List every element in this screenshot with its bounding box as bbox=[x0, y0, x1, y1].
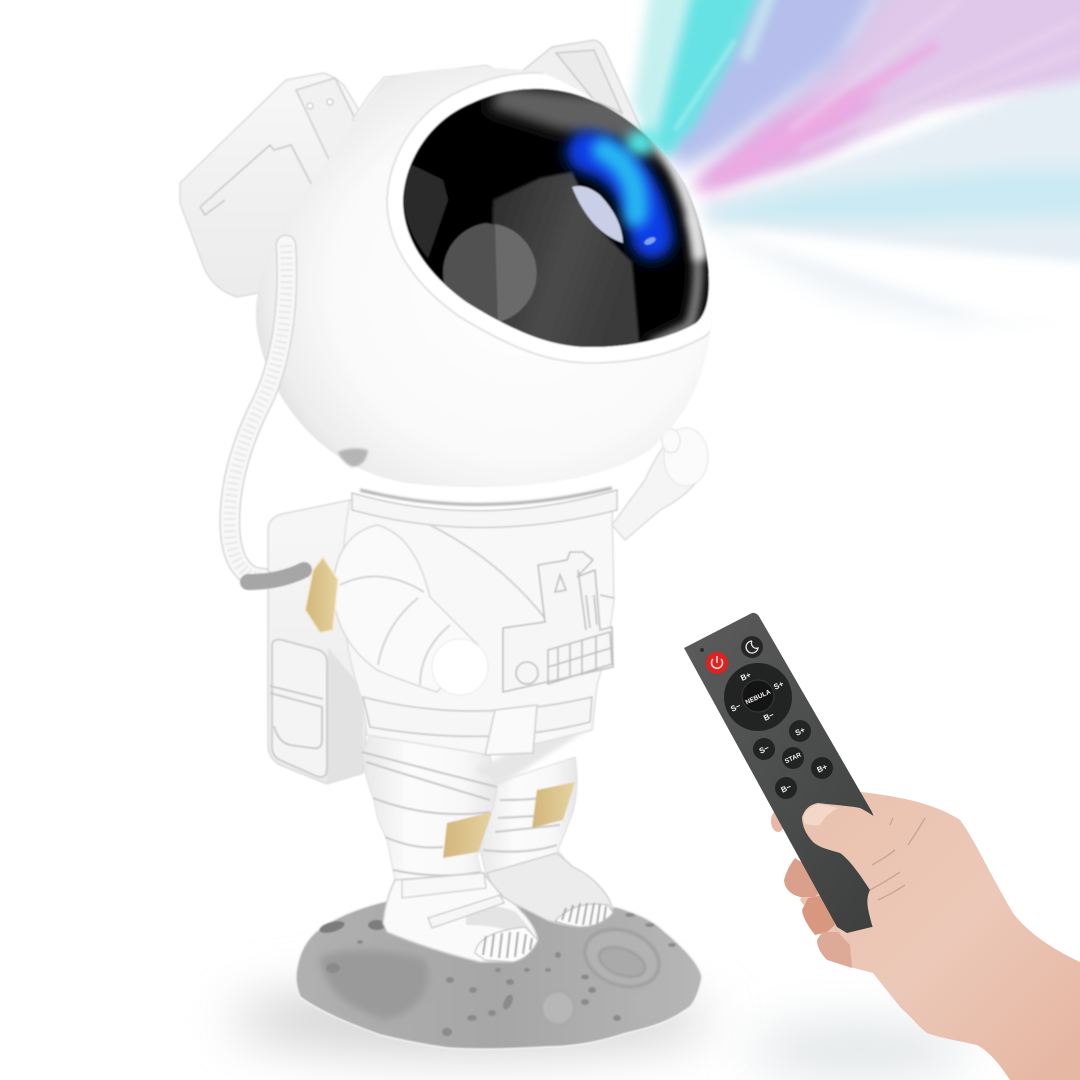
right shoe ribs bbox=[555, 904, 613, 927]
visor glass bbox=[395, 80, 715, 355]
knuckle creases bbox=[870, 818, 925, 900]
cable main bbox=[230, 245, 287, 578]
button: star: STAR bbox=[784, 752, 803, 765]
remote body bbox=[684, 613, 890, 933]
beam: pale grey-blue lower fan bbox=[700, 50, 1080, 270]
blue glow bbox=[588, 152, 652, 238]
gold shoulder patch bbox=[305, 557, 338, 633]
gold knee patch left bbox=[443, 812, 492, 858]
thumb and palm bbox=[802, 803, 1000, 1035]
cyan outlet bbox=[626, 131, 654, 155]
backpack bbox=[268, 498, 368, 784]
visor rim bbox=[403, 89, 709, 347]
button: B plus: B+ bbox=[816, 762, 829, 775]
side units bbox=[180, 40, 643, 297]
button: B plus bbox=[811, 757, 833, 779]
beam: cyan band bbox=[705, 170, 1080, 222]
left shoe bbox=[383, 873, 538, 962]
near arm bbox=[305, 525, 488, 695]
finger one bbox=[784, 858, 830, 897]
button: star bbox=[782, 747, 804, 769]
cable rope weave bbox=[230, 245, 287, 578]
lens spark bbox=[643, 236, 657, 246]
light beams bbox=[632, 0, 1080, 330]
visor left panel bbox=[404, 165, 448, 258]
visor top grey haze bbox=[490, 85, 680, 170]
visor reflection right half bbox=[495, 224, 537, 322]
nebula dial: S− bbox=[729, 701, 743, 714]
cable outline bbox=[230, 245, 287, 578]
top right unit bbox=[521, 40, 643, 133]
helmet shell bbox=[256, 68, 712, 487]
hand behind remote bbox=[771, 792, 1080, 1080]
small craters bbox=[318, 913, 676, 1036]
left shoe ribs bbox=[475, 927, 538, 962]
nebula dial: S+ bbox=[772, 679, 786, 692]
large left crater bbox=[320, 950, 428, 1020]
cyan glow bbox=[604, 150, 636, 215]
nebula dial: B+ bbox=[739, 670, 753, 683]
crotch shade bbox=[475, 730, 587, 785]
right shoe bbox=[487, 853, 613, 927]
cable bbox=[230, 245, 304, 582]
palm and thumb shape bbox=[802, 803, 1000, 1035]
ground shadows bbox=[230, 984, 970, 1076]
grey-white dome edge bbox=[655, 135, 700, 260]
helmet collar cap bbox=[352, 65, 520, 130]
remote control bbox=[684, 613, 890, 933]
finger three bbox=[817, 932, 852, 968]
large right crater bbox=[577, 920, 667, 996]
thumb nail bbox=[803, 804, 838, 825]
inner right crater bbox=[595, 942, 649, 982]
fist bbox=[432, 639, 488, 695]
nebula dial: NEBULA bbox=[744, 688, 772, 706]
button: B minus bbox=[775, 777, 797, 799]
base shadow bbox=[230, 984, 710, 1056]
dome crater small bbox=[635, 991, 659, 1019]
neck shadow bbox=[360, 488, 612, 505]
moon base bbox=[296, 900, 702, 1049]
torso body bbox=[342, 500, 614, 755]
button: S plus: S+ bbox=[794, 725, 807, 738]
lens bbox=[572, 186, 623, 243]
left leg bbox=[362, 735, 497, 880]
leg ridges bbox=[362, 752, 560, 876]
backpack side shade bbox=[327, 647, 363, 784]
helmet bbox=[256, 68, 715, 487]
right leg bbox=[480, 757, 577, 880]
belt bbox=[363, 697, 592, 736]
backpack body bbox=[268, 498, 368, 784]
raised thumb bbox=[662, 429, 680, 453]
left shoe strap bbox=[428, 895, 504, 928]
button: S minus bbox=[753, 738, 775, 760]
chest control panel bbox=[503, 552, 614, 692]
screw holes bbox=[307, 99, 368, 171]
nebula dial: B− bbox=[762, 710, 776, 723]
visor rim white bbox=[403, 89, 709, 347]
astronaut figure bbox=[180, 40, 715, 1049]
beam: faint lower haze bbox=[710, 228, 1080, 322]
visor base black bbox=[395, 80, 715, 355]
shoulder and upper arm bbox=[333, 525, 478, 692]
beam: pink highlight bbox=[715, 40, 940, 182]
left unit box bbox=[180, 73, 377, 297]
belt buckle bbox=[485, 705, 537, 755]
gold knee patch right bbox=[532, 782, 575, 828]
backpack pocket flap bbox=[270, 686, 323, 748]
button: S plus bbox=[789, 720, 811, 742]
visor right grey edge bbox=[650, 215, 698, 345]
beam: white band below bbox=[705, 225, 1080, 330]
button: power bbox=[706, 652, 728, 674]
beam: cyan upper bbox=[645, 0, 775, 160]
left unit recess lines bbox=[200, 145, 316, 215]
chest seam bbox=[430, 525, 548, 622]
beam: white streak bbox=[675, 40, 735, 130]
cable grey end bbox=[248, 570, 304, 582]
backpack pocket bbox=[272, 640, 327, 777]
beam: pale left edge bbox=[632, 0, 700, 140]
nebula dial bbox=[724, 663, 792, 731]
left shoe toe panel bbox=[466, 907, 536, 938]
hand shadow bbox=[750, 1024, 970, 1076]
beam: pale cyan sweep bbox=[745, 0, 772, 60]
arm on the far side bbox=[612, 428, 708, 540]
button: S minus: S− bbox=[758, 743, 771, 756]
raised forearm bbox=[612, 430, 705, 540]
dome crater bbox=[542, 992, 574, 1024]
visor rim shade bbox=[403, 89, 709, 347]
beam: lilac upper fan bbox=[690, 0, 1080, 190]
collar ring bbox=[352, 490, 617, 528]
fingertip behind remote bbox=[771, 810, 785, 832]
shoes and legs bbox=[362, 730, 613, 962]
back of hand bbox=[800, 792, 1080, 1080]
beam: periwinkle bbox=[665, 0, 900, 170]
raised hand bbox=[664, 428, 708, 486]
torso bbox=[342, 488, 617, 755]
finger two bbox=[802, 895, 835, 935]
button: B minus: B− bbox=[780, 782, 793, 795]
beam: pink ribbon bbox=[695, 85, 880, 195]
chin vent bbox=[338, 448, 368, 467]
visor centre panel bbox=[490, 172, 640, 350]
ankle band bbox=[402, 873, 486, 898]
left unit screw plate bbox=[296, 78, 377, 187]
visor round reflection bbox=[442, 222, 498, 318]
beam: lilac streaks bbox=[790, 0, 1080, 150]
top right screw plate bbox=[556, 50, 622, 113]
indicator light bbox=[700, 648, 704, 652]
button: timer bbox=[741, 636, 763, 658]
arm ridges bbox=[340, 576, 450, 685]
base rock bbox=[296, 900, 702, 1049]
